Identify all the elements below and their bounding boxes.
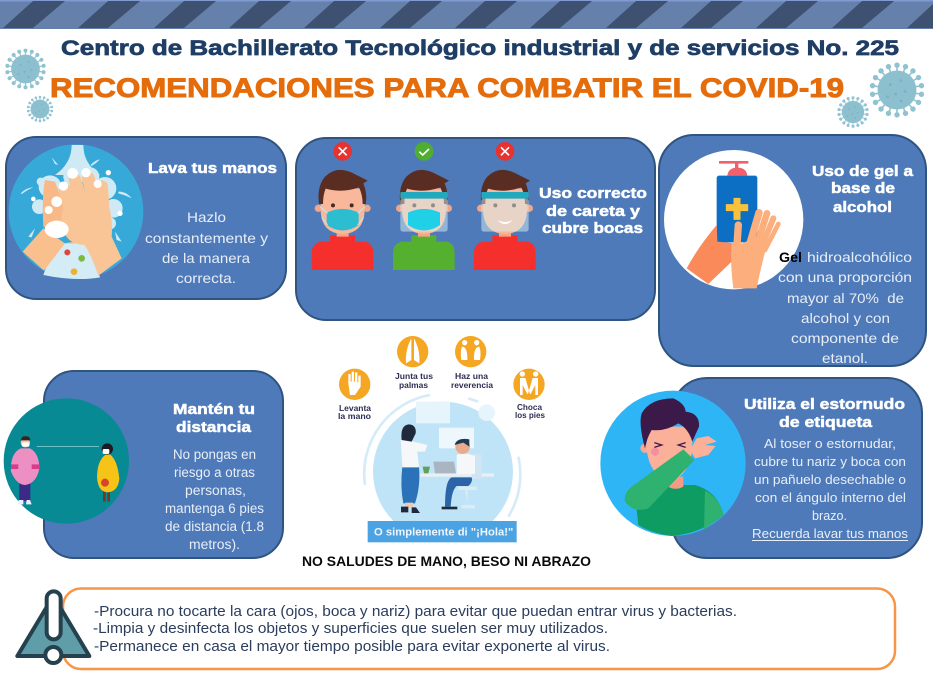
callout frame [63,588,895,669]
desk [420,454,494,508]
body text: Al toser o estornudar, [764,436,896,451]
body text: mayor al 70% de [787,290,904,306]
figure: mask only [312,170,373,270]
body text: cubre tu nariz y boca con [754,454,906,469]
body text: constantemente y [145,230,268,246]
advice text: -Permanece en casa el mayor tiempo posible para evitar exponerte al virus. [94,638,610,655]
panel: gel a base de alcohol [659,135,926,366]
man [442,439,475,509]
icon: gel bottle and hands [664,150,803,289]
body text: brazo. [812,508,847,523]
figure: mask and shield [393,170,455,270]
school name heading: Centro de Bachillerato Tecnológico industrial y de servicios No. 225 [61,36,899,60]
body text: hidroalcohólico [807,249,912,265]
body text [165,447,264,552]
icon: bow [455,336,486,367]
heading: Mantén tu [173,401,255,418]
icon: two people at a distance [4,398,129,524]
woman [401,424,427,513]
body text: componente de [791,330,899,346]
advice text: -Limpia y desinfecta los objetos y superficies que suelen ser muy utilizados. [93,620,608,637]
heading: distancia [176,419,252,436]
body text: con el ángulo interno del [755,490,906,505]
icon: wrong mark [333,142,352,161]
heading [812,163,914,216]
panel: alternative greetings illustration [339,336,545,542]
greeting labels: Junta tus [395,372,434,381]
icon: correct mark [415,142,433,161]
body text [752,436,909,541]
heading: alcohol [833,199,892,216]
heading: de etiqueta [779,414,873,431]
header band [0,0,933,29]
panel: manten tu distancia [4,371,283,558]
body text: metros). [189,537,240,552]
body text [145,209,268,286]
card background [659,135,926,366]
body text: Hazlo [187,209,226,225]
greeting labels: los pies [515,411,546,420]
large office circle [364,395,520,542]
body text: riesgo a otras [174,465,255,480]
main title: RECOMENDACIONES PARA COMBATIR EL COVID-19 [50,73,844,103]
card background [44,371,283,558]
heading: Uso de gel a [812,163,914,180]
panel: careta y cubre bocas [296,138,655,320]
body text: de la manera [162,250,250,266]
body text: Recuerda lavar tus manos [752,526,909,541]
greeting labels: la mano [338,412,371,421]
body text: No pongas en [173,447,256,462]
body text: con una proporción [778,269,912,285]
icon: warning triangle [17,591,89,663]
body text: Gel [779,249,802,265]
heading: Utiliza el estornudo [744,396,905,413]
icon: virus small left [27,96,53,122]
greeting labels: Choca [517,403,543,412]
greeting labels: palmas [399,381,429,390]
body text: alcohol y con [801,310,890,326]
body text: correcta. [176,270,236,286]
greeting labels: Haz una [455,372,489,381]
card background [296,138,655,320]
figures with masks and shields [312,142,536,270]
advice text [93,603,737,655]
icon: wrong mark [496,142,514,161]
body text: mantenga 6 pies [165,501,264,516]
panel: estornudo de etiqueta [600,378,922,558]
card background [6,137,286,299]
card background [672,378,922,558]
figure: shield only [474,170,536,270]
advice text: -Procura no tocarte la cara (ojos, boca y nariz) para evitar que puedan entrar virus y bacterias. [94,603,737,620]
icon: person sneezing into elbow [600,391,746,536]
greeting banner: O simplemente di "¡Hola!" [374,527,513,539]
heading [539,185,647,237]
body text: un pañuelo desechable o [754,472,906,487]
body text [778,249,912,366]
icon: virus top right [870,63,924,117]
body text: etanol. [822,350,868,366]
icon: virus small right [838,97,868,127]
icon: raise hand [339,369,370,400]
caption: no saludes: NO SALUDES DE MANO, BESO NI ABRAZO [302,553,591,569]
heading: Uso correcto [539,185,647,202]
heading: Lava tus manos [148,160,277,177]
heading [173,401,255,436]
heading: de careta y [546,203,641,220]
icon: join palms [397,336,428,367]
body text: de distancia (1.8 [165,519,264,534]
panel: additional advice [17,588,895,669]
greeting labels: reverencia [451,381,494,390]
heading: cubre bocas [542,220,643,237]
panel: lava tus manos [6,137,286,299]
body text: personas, [185,483,246,498]
icon: virus top left [6,49,45,89]
icon: touch feet [513,369,545,400]
heading: base de [831,180,895,197]
icon: washing hands [9,144,143,279]
greeting labels [338,372,546,421]
greeting banner [368,521,517,542]
heading [744,396,905,431]
greeting labels: Levanta [339,404,372,413]
